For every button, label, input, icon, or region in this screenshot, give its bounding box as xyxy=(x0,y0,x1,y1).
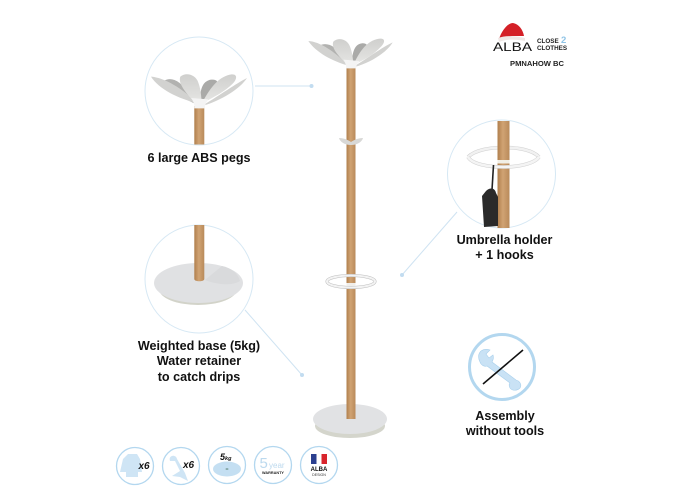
panel: base detail xyxy=(145,225,253,333)
icon: 5 year warranty: 5 xyxy=(260,455,268,472)
icon: no tools xyxy=(470,334,534,400)
heading: no tools: Assembly xyxy=(475,409,535,423)
connector: umbrella holder xyxy=(400,212,457,277)
icon: 6 coats xyxy=(116,448,154,484)
umbrella xyxy=(482,189,498,227)
icon: 6 umbrellas xyxy=(162,448,200,484)
icon: Alba design: ALBA xyxy=(311,467,328,473)
icon: 5 year warranty: year xyxy=(269,461,285,470)
panel: umbrella holder detail xyxy=(448,120,556,228)
icon: 5kg base xyxy=(208,446,246,484)
back of ring xyxy=(468,148,539,157)
icon row xyxy=(116,446,338,484)
logo: Alba Close 2 Clothes xyxy=(493,23,567,68)
logo tagline: CLOSE xyxy=(537,38,559,45)
product code: PMNAHOW BC xyxy=(510,59,565,68)
logo tagline: CLOTHES xyxy=(537,45,567,52)
stand base xyxy=(313,404,387,438)
pole detail xyxy=(194,225,204,281)
heading: no tools xyxy=(465,409,544,438)
heading: no tools: without tools xyxy=(465,424,544,438)
icon: 6 coats: x6 xyxy=(138,461,150,472)
front of ring xyxy=(468,157,539,167)
stand umbrella ring xyxy=(327,276,375,288)
strike line xyxy=(483,350,523,384)
heading: pegs: 6 large ABS pegs xyxy=(147,151,251,165)
icon: 5kg base: 5kg xyxy=(220,452,232,462)
pole detail xyxy=(194,106,204,144)
inset circle xyxy=(145,37,253,145)
base disc detail xyxy=(159,273,237,305)
heading: base: Water retainer xyxy=(157,354,241,368)
connector: pegs xyxy=(255,84,314,88)
logo tagline: 2 xyxy=(561,35,566,46)
heading: base: Weighted base (5kg) xyxy=(138,339,260,353)
icon: 5 year warranty: WARRANTY xyxy=(262,471,284,475)
logo tagline xyxy=(537,35,567,52)
stand flower pegs xyxy=(308,39,393,68)
main product: coat stand xyxy=(308,39,393,438)
wrench xyxy=(479,349,521,390)
heading: base: to catch drips xyxy=(158,370,240,384)
stand hook xyxy=(339,138,363,145)
heading: umbrella holder: Umbrella holder xyxy=(457,233,553,247)
connector: base xyxy=(245,310,304,377)
inset circle xyxy=(145,225,253,333)
santa hat xyxy=(498,23,525,42)
heading: umbrella holder: + 1 hooks xyxy=(475,248,534,262)
pole detail xyxy=(498,121,510,228)
panel: pegs detail xyxy=(145,37,253,145)
flower pegs detail xyxy=(151,74,247,108)
stand pole xyxy=(346,64,356,419)
logo wordmark: ALBA xyxy=(493,42,532,54)
icon: 6 umbrellas: x6 xyxy=(182,460,195,471)
umbrella strap xyxy=(492,165,494,190)
heading: umbrella holder xyxy=(457,233,553,262)
heading: base xyxy=(138,339,260,384)
inset circle xyxy=(448,120,556,228)
icon: Alba design xyxy=(300,446,338,484)
icon: Alba design: DESIGN xyxy=(312,473,326,477)
icon: 5 year warranty xyxy=(254,446,292,484)
